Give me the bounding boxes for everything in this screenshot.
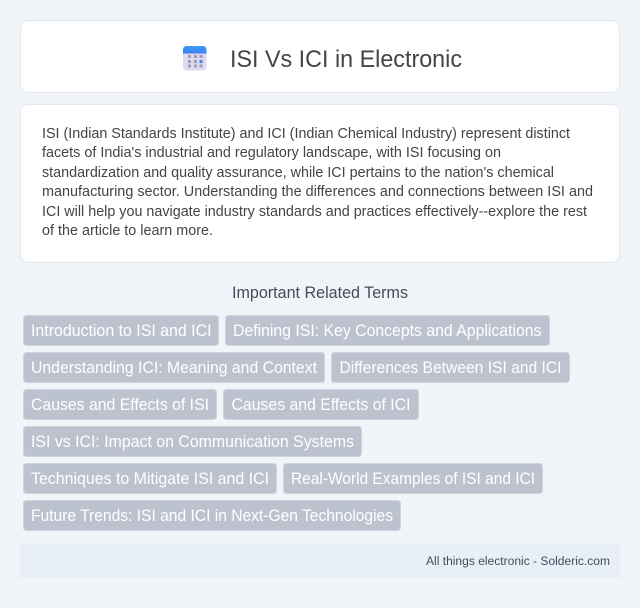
chip: techniques: Techniques to Mitigate ISI and ICI <box>31 470 269 488</box>
chip: real-world: Real-World Examples of ISI and ICI <box>291 470 535 488</box>
chip: impact <box>24 426 362 456</box>
chip: causes ICI: Causes and Effects of ICI <box>232 396 410 414</box>
footer: All things electronic - Solderic.com <box>426 554 610 568</box>
chip: differences <box>332 352 570 382</box>
chip: introduction: Introduction to ISI and ICI <box>31 322 212 340</box>
chip: causes ISI: Causes and Effects of ISI <box>31 396 209 414</box>
chip: defining ISI: Defining ISI: Key Concepts and Applications <box>233 322 542 340</box>
chip: techniques <box>24 464 276 494</box>
text block: introduction paragraph: ICI will help you navigate industry standards and practices effectively--explore the rest <box>42 204 587 220</box>
text block: introduction paragraph: manufacturing sector. Understanding the differences and connections between ISI and <box>42 184 593 200</box>
chip: causes ISI <box>24 390 216 420</box>
chip: differences: Differences Between ISI and ICI <box>340 359 562 377</box>
chip: future trends <box>24 500 400 530</box>
chip: real-world <box>284 464 542 494</box>
chip: defining ISI <box>226 316 550 346</box>
heading: important related terms: Important Related Terms <box>232 284 408 302</box>
text block: introduction paragraph <box>42 126 593 239</box>
chip: understanding ICI <box>24 352 324 382</box>
title: ISI Vs ICI in Electronic <box>230 46 462 73</box>
chip: understanding ICI: Understanding ICI: Meaning and Context <box>31 359 317 377</box>
text block: introduction paragraph: ISI (Indian Standards Institute) and ICI (Indian Chemical Industry) represent distinct <box>42 126 570 142</box>
icon: calendar <box>183 46 206 70</box>
panel: related term chips <box>24 316 570 530</box>
panel: introduction <box>20 104 620 262</box>
text block: introduction paragraph: of the article to learn more. <box>42 223 213 239</box>
chip: introduction <box>24 316 218 346</box>
chip: impact: ISI vs ICI: Impact on Communication Systems <box>31 433 354 451</box>
text block: introduction paragraph: facets of India's industrial and regulatory landscape, with ISI focusing on <box>42 145 501 161</box>
footer <box>20 544 620 578</box>
chip: future trends: Future Trends: ISI and ICI in Next-Gen Technologies <box>31 507 393 525</box>
text block: introduction paragraph: standardization and quality assurance, while ICI pertains to the nation's chemical <box>42 165 554 181</box>
chip: causes ICI <box>224 390 418 420</box>
panel: title header <box>20 20 620 92</box>
